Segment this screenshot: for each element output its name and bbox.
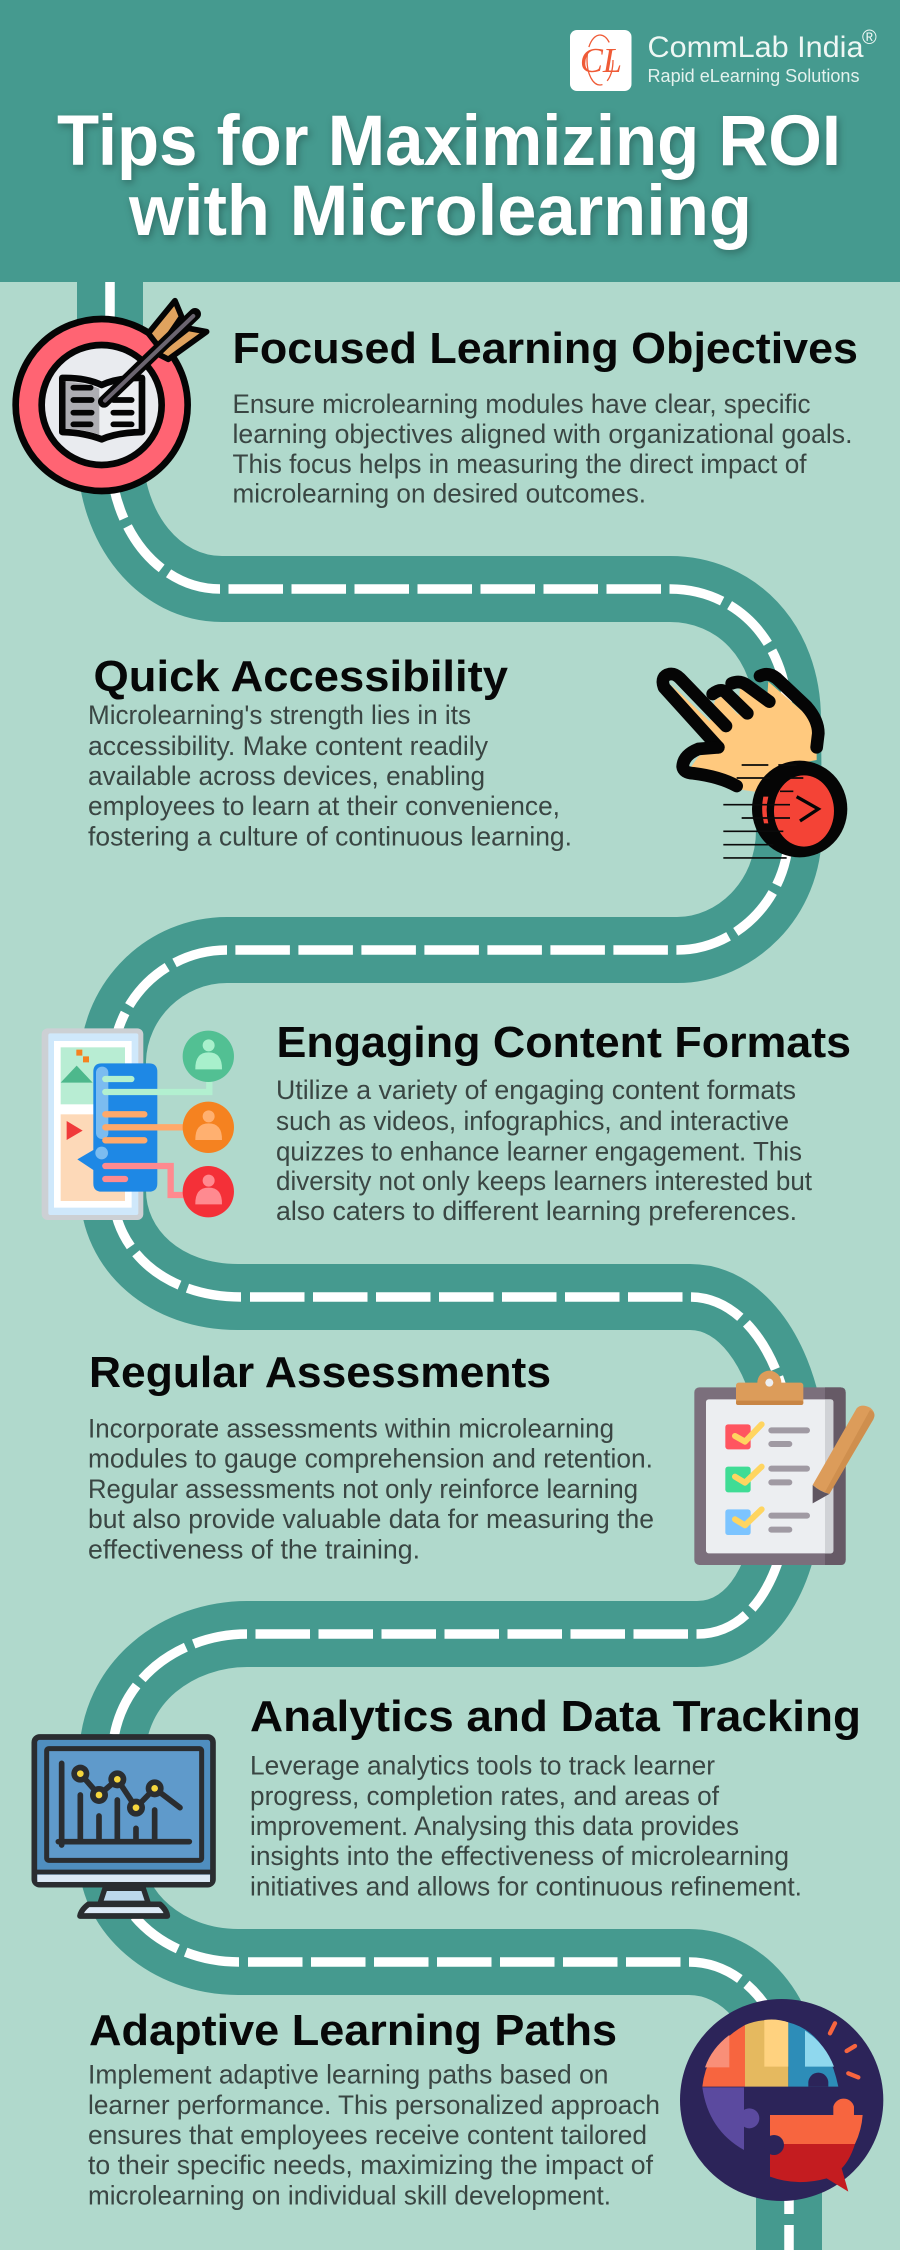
body text: Utilize a variety of engaging content formats <box>276 1075 796 1105</box>
body text: Implement adaptive learning paths based on <box>88 2060 608 2090</box>
body text: Leverage analytics tools to track learner <box>250 1750 715 1780</box>
logo <box>570 27 877 91</box>
body text: progress, completion rates, and areas of <box>250 1781 719 1811</box>
body text: such as videos, infographics, and interactive <box>276 1106 789 1136</box>
heading: Engaging Content Formats <box>276 1018 851 1067</box>
logo: ® <box>862 27 877 49</box>
winding road <box>110 270 790 2250</box>
body text: initiatives and allows for continuous refinement. <box>250 1872 802 1902</box>
section: quick accessibility <box>88 652 847 858</box>
title: with Microlearning <box>128 172 752 251</box>
logo: Rapid eLearning Solutions <box>648 65 860 86</box>
body text: available across devices, enabling <box>88 761 485 791</box>
section: focused learning objectives <box>16 301 858 508</box>
body text: Microlearning's strength lies in its <box>88 700 471 730</box>
icon: monitor with chart <box>34 1737 213 1916</box>
body text: Regular assessments not only reinforce learning <box>88 1474 638 1504</box>
icon: pointing hand and play button <box>663 674 847 858</box>
header band <box>0 0 900 282</box>
logo: CL <box>580 41 622 80</box>
body text: fostering a culture of continuous learning. <box>88 822 572 852</box>
body text: quizzes to enhance learner engagement. This <box>276 1136 802 1166</box>
logo: CommLab India <box>648 31 864 64</box>
icon: clipboard checklist and pencil <box>694 1371 874 1565</box>
body text: microlearning on individual skill development. <box>88 2180 611 2210</box>
body text: diversity not only keeps learners interested but <box>276 1166 812 1196</box>
section: analytics and data tracking <box>34 1692 861 1916</box>
body text <box>88 1414 654 1564</box>
body text: Incorporate assessments within microlearning <box>88 1414 614 1444</box>
body text <box>250 1750 802 1902</box>
body text: learning objectives aligned with organizational goals. <box>232 419 852 449</box>
body text: learner performance. This personalized approach <box>88 2090 660 2120</box>
body text <box>88 700 572 852</box>
body text: to their specific needs, maximizing the impact of <box>88 2150 653 2180</box>
body text: modules to gauge comprehension and retention. <box>88 1444 653 1474</box>
body text: ensures that employees receive content tailored <box>88 2120 647 2150</box>
body text <box>88 2060 660 2210</box>
section: adaptive learning paths <box>88 1999 883 2210</box>
body text: but also provide valuable data for measuring the <box>88 1504 654 1534</box>
body text: improvement. Analysing this data provides <box>250 1811 739 1841</box>
body text: Ensure microlearning modules have clear, specific <box>232 389 810 419</box>
body text <box>232 389 852 508</box>
section: regular assessments <box>88 1348 874 1565</box>
body text: effectiveness of the training. <box>88 1534 420 1564</box>
heading: Quick Accessibility <box>94 652 509 701</box>
heading: Adaptive Learning Paths <box>89 2006 617 2055</box>
title <box>57 102 841 251</box>
icon: device with chat bubble and users <box>42 1028 234 1220</box>
heading: Analytics and Data Tracking <box>250 1692 861 1741</box>
body text <box>276 1075 812 1226</box>
title: Tips for Maximizing ROI <box>57 102 841 181</box>
body text: employees to learn at their convenience, <box>88 791 560 821</box>
icon: target with book and arrow <box>16 301 207 491</box>
heading: Focused Learning Objectives <box>232 324 858 373</box>
body text: microlearning on desired outcomes. <box>232 478 646 508</box>
icon: puzzle head <box>680 1999 883 2201</box>
section: engaging content formats <box>42 1018 851 1226</box>
body text: insights into the effectiveness of microlearning <box>250 1841 789 1871</box>
body text: accessibility. Make content readily <box>88 731 488 761</box>
body text: also caters to different learning preferences. <box>276 1196 797 1226</box>
heading: Regular Assessments <box>89 1348 551 1397</box>
body text: This focus helps in measuring the direct impact of <box>232 449 807 479</box>
